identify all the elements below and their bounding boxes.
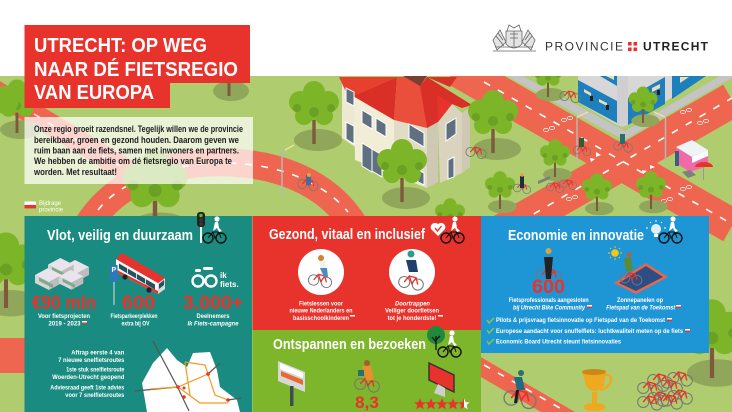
caption: zonnepanelen: Zonnepanelen op: [617, 297, 663, 304]
intro text block: ruim baan aan de fiets, samen met inwoners en partners.: [34, 146, 239, 156]
logo: ik fiets: ik: [220, 271, 227, 280]
road centre dashes: [34, 82, 732, 411]
title: VAN EUROPA: [34, 81, 154, 104]
text: snelfietsroutes milestones: Aftrap eerste 4 van: [71, 350, 125, 356]
panel: economie en innovatie: [481, 216, 709, 353]
caption: fietsprofessionals: bij Utrecht Bike Community: [513, 304, 585, 312]
sidewalk and office building: [507, 76, 732, 140]
title: UTRECHT: OP WEG: [34, 34, 207, 57]
stat: 600 parking spots: Fietsparkeerplekken: [110, 313, 158, 320]
stat: 600 parking spots: 600: [122, 293, 155, 314]
legend: bijdrage provincie: [24, 201, 64, 214]
text: snelfietsroutes milestones: Woerden-Utrecht geopend: [52, 374, 125, 381]
heading: Vlot, veilig en duurzaam: [47, 228, 193, 244]
stat: 90 million euro: Voor fietsprojecten: [38, 313, 90, 320]
illustration: business man with bike: 600: [532, 277, 565, 298]
heading: Ontspannen en bezoeken: [273, 337, 426, 353]
text: snelfietsroutes milestones: voor 7 snelfietsroutes: [65, 392, 125, 399]
intro text block: Onze regio groeit razendsnel. Tegelijk willen we de provincie: [34, 124, 243, 134]
stat: 90 million euro: [32, 293, 96, 328]
illustration: parked red bikes: [638, 372, 692, 410]
caption: doortrappen: tot je honderdste!: [388, 315, 436, 322]
icon: traffic light with cyclist: [197, 212, 226, 243]
illustration: child cycling lessons: [298, 249, 344, 295]
text: snelfietsroutes milestones: 7 nieuwe snelfietsroutes: [58, 357, 125, 364]
icon: bus and parking sign: P: [112, 267, 116, 274]
logo Provincie Utrecht: PROVINCIE: [545, 40, 623, 54]
caption: zonnepanelen: Fietspad van de Toekomst: [606, 304, 676, 312]
text: snelfietsroutes milestones: 1ste stuk snelfietsroute: [66, 366, 125, 374]
stat: 3000 participants: 3.000+: [183, 293, 243, 314]
caption: fietslessen: nieuwe Nederlanders en: [290, 308, 353, 314]
checklist: Economic Board Utrecht steunt fietsinnovaties: [496, 338, 622, 346]
stat: 3000 participants: Deelnemers: [196, 313, 230, 320]
text: snelfietsroutes milestones: Adviesraad geeft 1ste advies: [50, 384, 125, 392]
icon: golden trophy: [582, 369, 611, 411]
intro text block: bereikbaar, groen en gezond houden. Daarom geven we: [34, 135, 239, 145]
stat: 90 million euro: 2019 - 2023: [48, 320, 81, 328]
logo: ik fiets: [192, 267, 239, 289]
panel: gezond, vitaal en inclusief: [252, 216, 481, 330]
logo: ik fiets: fiets.: [220, 280, 239, 289]
stat: rating 8,3 with cyclist: 8,3: [355, 393, 379, 412]
illustration: solar panel bike path with sun: [608, 246, 668, 294]
stat: 600 parking spots: extra bij OV: [122, 320, 150, 328]
caption: fietsprofessionals: [509, 297, 592, 312]
legend: bijdrage provincie: Bijdrage: [39, 201, 62, 207]
caption: doortrappen: Veiliger doorfietsen: [385, 308, 439, 314]
panel: vlot, veilig en duurzaam: [24, 212, 252, 412]
road bicycle markings and arrows: [543, 108, 709, 203]
icon: light bulb with cyclist: [646, 216, 682, 243]
stat: 3000 participants: [183, 293, 243, 328]
icon: stacks of money: [35, 258, 89, 290]
caption: zonnepanelen: [606, 297, 681, 312]
intro text block: We hebben de ambitie om dé fietsregio van Europa te: [34, 156, 232, 166]
checklist: [487, 317, 690, 346]
logo Provincie Utrecht: UTRECHT: [643, 40, 709, 54]
house with red roof: [339, 76, 472, 188]
illustration: cyclist on road: [504, 370, 536, 408]
caption: fietsprofessionals: Fietsprofessionals aangesloten: [509, 297, 589, 304]
checklist: Pilots & prijsvraag fietsinnovatie op Fietspad van de Toekomst: [496, 317, 665, 324]
title: [24, 25, 250, 108]
icon: monitor with stars: [414, 363, 470, 409]
text: snelfietsroutes milestones: [50, 350, 125, 399]
checklist: Europese aandacht voor snuffelfiets: luchtkwaliteit meten op de fiets: [496, 328, 684, 335]
legend: bijdrage provincie: provincie: [39, 208, 64, 214]
street lamps: [282, 112, 666, 196]
illustration: business man with bike: [532, 248, 565, 298]
icon: bus and parking sign: [110, 253, 165, 305]
illustration: billboard: [278, 361, 305, 406]
stat: 90 million euro: €90 mln: [32, 293, 96, 314]
icon: tree with cyclist: [427, 326, 461, 357]
heading: Economie en innovatie: [508, 228, 644, 244]
panel: ontspannen en bezoeken: [252, 326, 481, 412]
cyclists, bikes and food truck in the scene: [298, 91, 713, 194]
logo Provincie Utrecht: [493, 25, 709, 54]
title: NAAR DÉ FIETSREGIO: [34, 58, 238, 81]
caption: doortrappen: Doortrappen: [395, 300, 430, 308]
trees: [0, 59, 732, 387]
caption: fietslessen: basisschoolkinderen: [293, 315, 349, 322]
illustration: senior on e-bike: [389, 249, 435, 295]
caption: fietslessen: Fietslessen voor: [299, 300, 344, 308]
caption: fietslessen: [290, 300, 355, 322]
map: Utrecht cycle routes: [135, 341, 241, 412]
heading: Gezond, vitaal en inclusief: [269, 227, 425, 243]
stat: 600 parking spots: [110, 293, 158, 328]
intro text block: worden. Met resultaat!: [33, 167, 117, 177]
stat: 3000 participants: Ik Fiets-campagne: [188, 320, 239, 328]
icon: heart with cyclist: [431, 216, 464, 243]
intro text block: [24, 117, 253, 184]
caption: doortrappen: [385, 300, 443, 322]
stat: rating 8,3 with cyclist: [355, 360, 379, 412]
